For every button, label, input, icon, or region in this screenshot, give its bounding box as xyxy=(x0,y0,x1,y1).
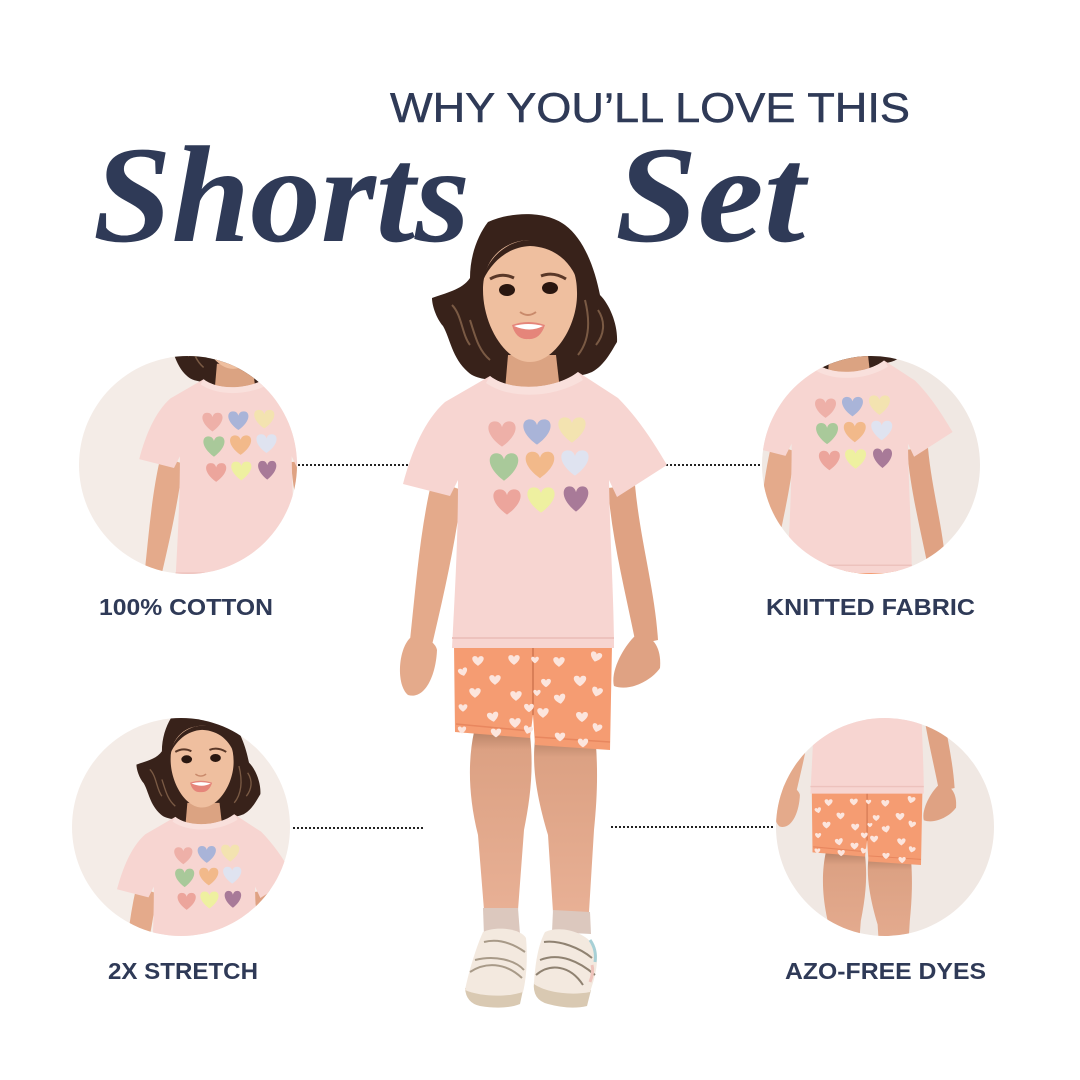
panel: knitted fabric xyxy=(762,356,980,615)
heading: why you'll love this: WHY YOU’LL LOVE THIS xyxy=(390,84,910,131)
circle photo: shirt front view xyxy=(762,356,980,574)
title: Shorts Set: Set xyxy=(615,118,809,271)
panel: 2x stretch xyxy=(72,718,290,979)
connector: azo-free dyes xyxy=(611,826,775,828)
panel: 100% cotton xyxy=(79,356,297,615)
circle photo: shorts close-up xyxy=(776,718,994,936)
label: 100% cotton: 100% COTTON xyxy=(99,594,273,620)
circle photo: child upper body xyxy=(72,718,290,936)
label: azo-free dyes: AZO-FREE DYES xyxy=(785,958,986,984)
central photo of child xyxy=(400,214,667,1008)
connector: 2x stretch xyxy=(293,827,423,829)
label: 2x stretch: 2X STRETCH xyxy=(108,958,258,984)
title: Shorts Set xyxy=(93,118,809,271)
connector: knitted fabric xyxy=(666,464,760,466)
connector: 100% cotton xyxy=(298,464,408,466)
title: Shorts Set: Shorts xyxy=(93,118,470,271)
panel: azo-free dyes xyxy=(776,718,994,979)
circle photo: shirt left view xyxy=(79,356,297,574)
label: knitted fabric: KNITTED FABRIC xyxy=(766,594,975,620)
